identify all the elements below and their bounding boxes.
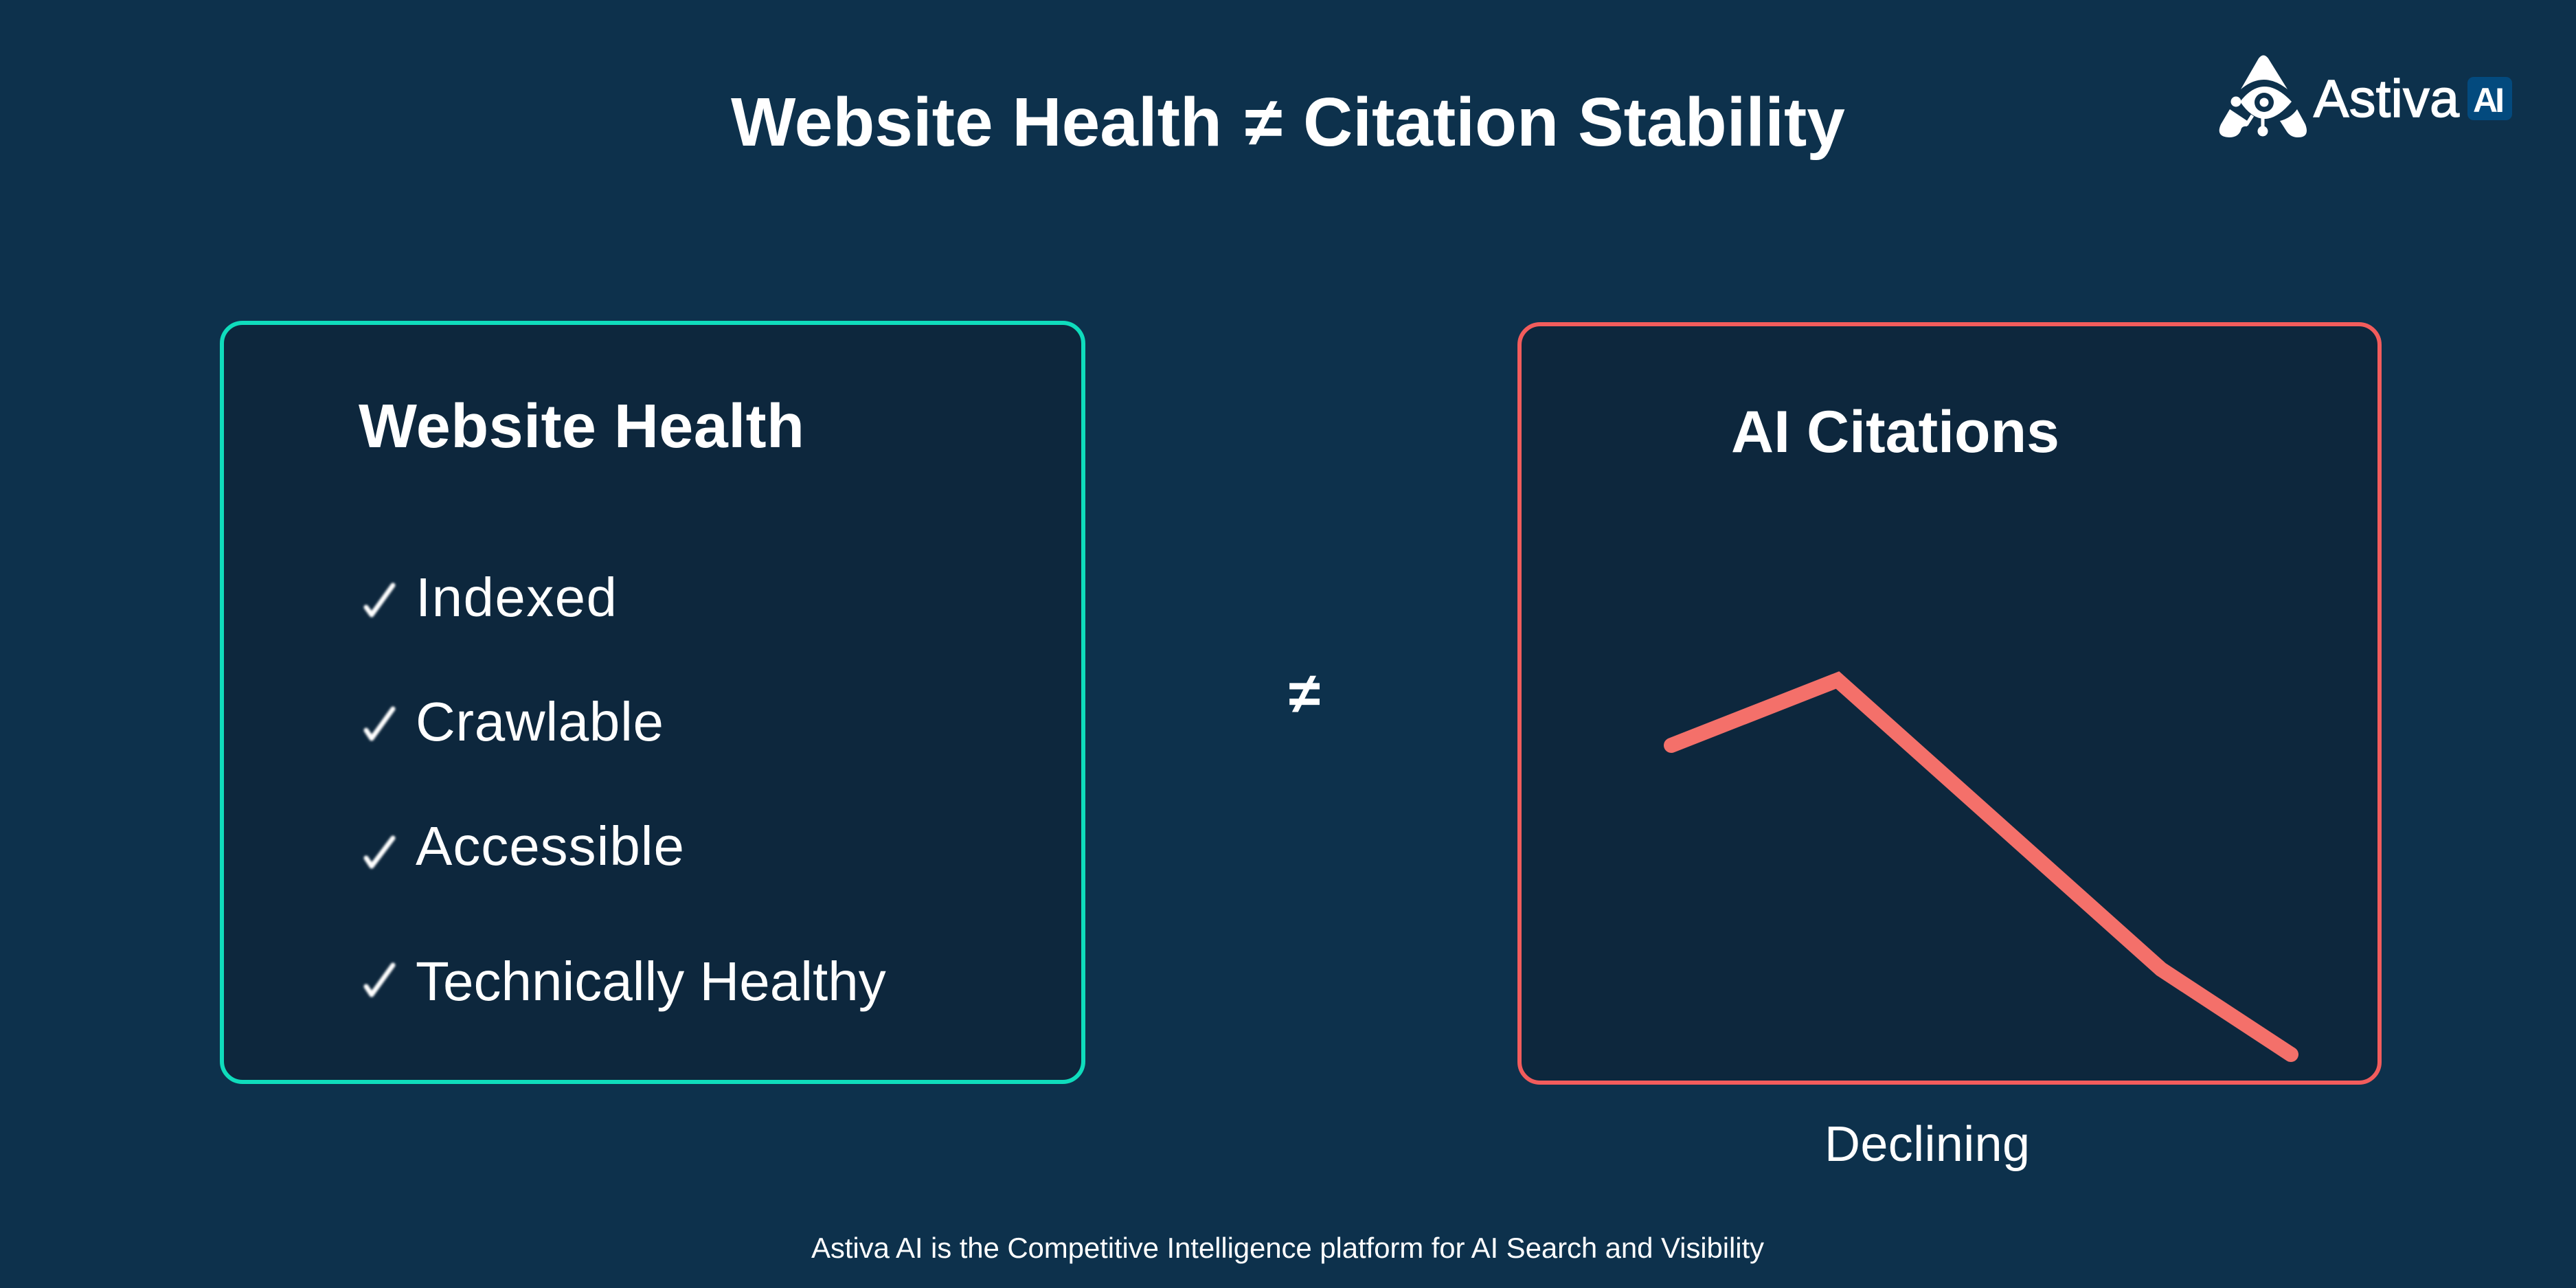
panel: website health <box>222 323 1083 1082</box>
checklist item: accessible: Accessible <box>416 815 684 877</box>
icon: eye in A mark <box>2219 55 2307 137</box>
logo badge <box>2467 77 2512 120</box>
panel heading: website health: Website Health <box>359 392 804 461</box>
line chart: declining citations <box>1671 680 2291 1054</box>
checklist item: technically healthy: Technically Healthy <box>416 951 886 1012</box>
logo badge: AI <box>2473 81 2505 120</box>
panel: ai citations <box>1519 324 2380 1083</box>
not-equal sign: ≠ <box>1289 661 1320 725</box>
logo: Astiva AI <box>2219 55 2512 137</box>
panel heading: ai citations: AI Citations <box>1731 399 2059 465</box>
logo wordmark: Astiva <box>2314 69 2459 128</box>
chart caption: Declining <box>1824 1117 2030 1172</box>
title: Citation Stability <box>1303 84 1845 161</box>
checklist item: crawlable: Crawlable <box>416 691 664 752</box>
footer tagline: Astiva AI is the Competitive Intelligence platform for AI Search and Visibility <box>811 1232 1764 1264</box>
checklist item: indexed: Indexed <box>416 567 617 628</box>
title: Website Health <box>731 84 1222 161</box>
title: ≠ <box>1245 84 1283 161</box>
